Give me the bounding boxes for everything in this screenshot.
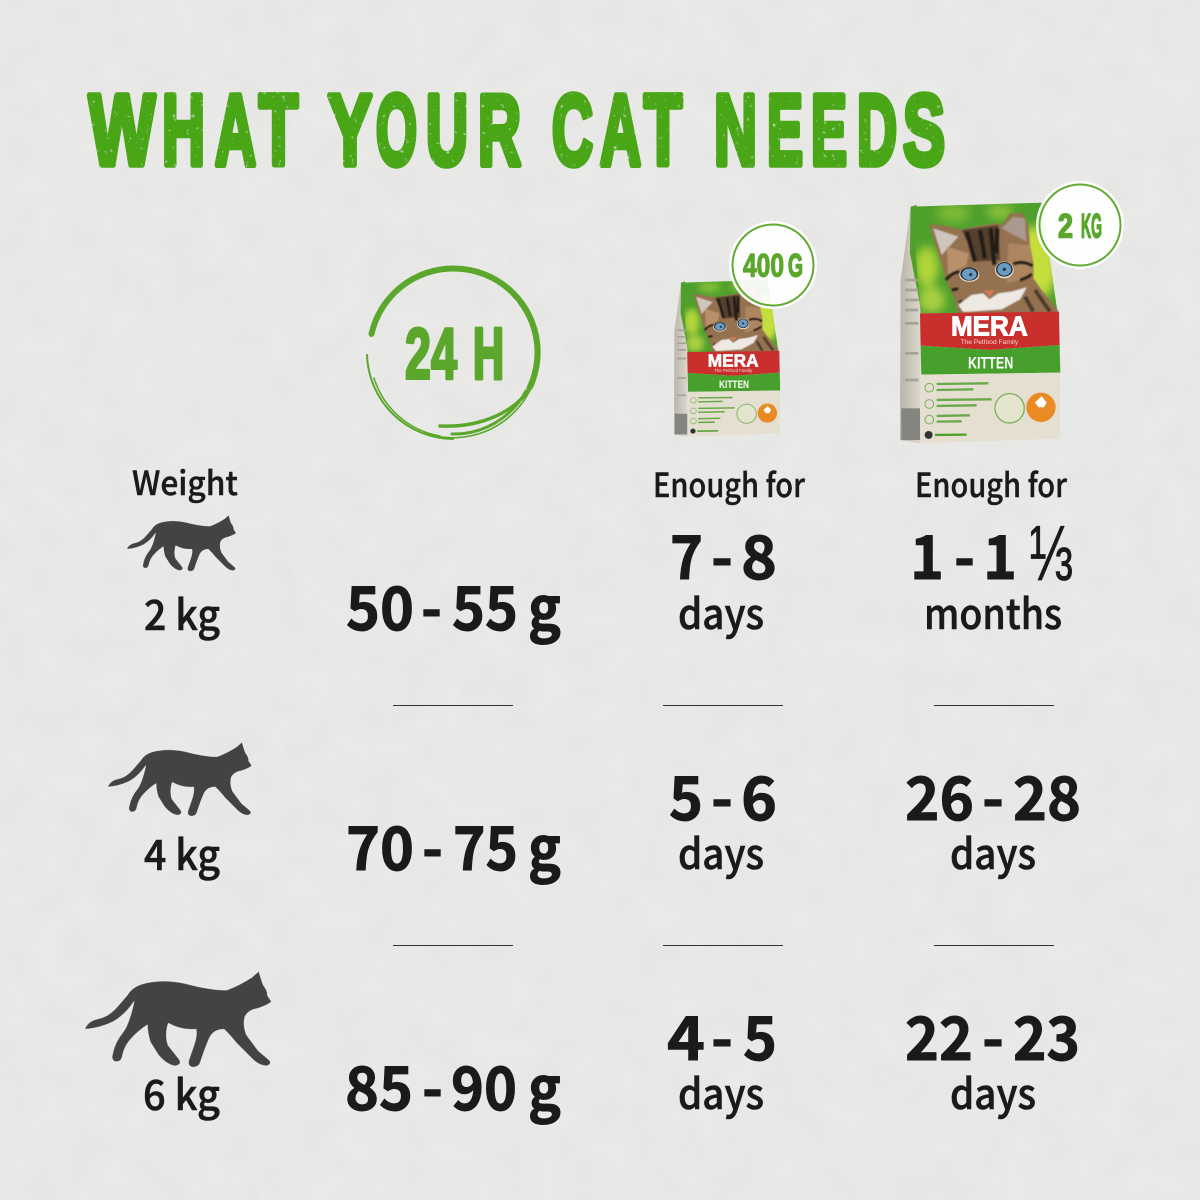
value: 26 - 28 days: days bbox=[950, 821, 1036, 882]
title: A bbox=[215, 75, 256, 187]
value: 26 - 28 days: - bbox=[982, 751, 1004, 838]
value: 4 - 5 days: 5 bbox=[743, 991, 777, 1078]
value: 85 - 90 g bbox=[345, 1041, 561, 1128]
badge: 400 G: G bbox=[788, 248, 803, 284]
value: 4 - 5 days: - bbox=[711, 991, 733, 1078]
value: 22 - 23 days bbox=[905, 991, 1080, 1122]
value: 26 - 28 days: 28 bbox=[1013, 751, 1081, 838]
icon: cat 2 kg bbox=[127, 515, 236, 571]
value: 4 - 5 days: days bbox=[678, 1061, 764, 1122]
badge: 400 G: 400 bbox=[743, 248, 784, 284]
title: A bbox=[600, 75, 641, 187]
value: 22 - 23 days: - bbox=[982, 991, 1004, 1078]
product bag: 2 kg: KITTEN bbox=[968, 354, 1013, 373]
value: 22 - 23 days: 22 bbox=[905, 991, 973, 1078]
value: 7 - 8 days: 7 bbox=[670, 510, 703, 597]
value: 1 - 1 1/3 months: - bbox=[954, 510, 975, 597]
label: 6 kg: 6 kg bbox=[143, 1062, 220, 1123]
product bag: 400 g: The Petfood Family bbox=[714, 368, 753, 373]
value: 26 - 28 days bbox=[905, 751, 1081, 882]
title: W bbox=[89, 75, 155, 187]
value: 50 - 55 g: g bbox=[528, 561, 561, 648]
title bbox=[89, 75, 945, 187]
value: 5 - 6 days: 5 bbox=[669, 751, 703, 838]
value: 22 - 23 days: days bbox=[950, 1061, 1036, 1122]
icon: cat 4 kg bbox=[108, 742, 252, 816]
value: 70 - 75 g: g bbox=[528, 801, 561, 888]
value: 85 - 90 g: 85 bbox=[345, 1041, 413, 1128]
dividers row 2 bbox=[393, 944, 1054, 946]
product bag: 400 g bbox=[674, 278, 780, 436]
value: 1 - 1 1/3 months: 1 bbox=[910, 510, 944, 597]
title: T bbox=[259, 75, 298, 187]
title: E bbox=[767, 75, 803, 187]
value: 7 - 8 days bbox=[670, 510, 777, 642]
value: 70 - 75 g bbox=[346, 801, 561, 888]
badge: 2 KG: KG bbox=[1081, 208, 1102, 246]
icon: 24 H brush circle bbox=[367, 268, 539, 439]
title: Y bbox=[328, 75, 372, 187]
product bag: 400 g: KITTEN bbox=[719, 379, 749, 391]
badge: 400 G bbox=[729, 221, 817, 309]
title: T bbox=[644, 75, 682, 187]
title: R bbox=[478, 75, 521, 187]
heading: enough for 2 kg: Enough for bbox=[915, 459, 1067, 507]
title: C bbox=[552, 75, 593, 187]
label: 2 kg: 2 kg bbox=[144, 582, 220, 643]
title: E bbox=[811, 75, 847, 187]
value: 4 - 5 days: 4 bbox=[667, 991, 705, 1078]
label: 4 kg: 4 kg bbox=[144, 822, 220, 883]
value: 85 - 90 g: g bbox=[528, 1041, 561, 1128]
value: 1 - 1 1/3 months: ⅓ bbox=[1029, 491, 1073, 603]
product bag: 2 kg: The Petfood Family bbox=[960, 339, 1019, 346]
title: U bbox=[426, 75, 468, 187]
value: 50 - 55 g: 55 bbox=[452, 561, 518, 648]
product bag: 2 kg: MERA bbox=[951, 311, 1028, 342]
value: 70 - 75 g: 70 bbox=[346, 801, 414, 888]
24 H label: 24 bbox=[405, 314, 457, 394]
value: 5 - 6 days: - bbox=[711, 751, 733, 838]
title: S bbox=[903, 75, 945, 187]
value: 1 - 1 1/3 months bbox=[910, 491, 1073, 642]
dividers row 1 bbox=[393, 704, 1054, 706]
value: 50 - 55 g: 50 bbox=[346, 561, 414, 648]
24 H label: H bbox=[473, 314, 504, 394]
value: 26 - 28 days: 26 bbox=[905, 751, 974, 838]
value: 22 - 23 days: 23 bbox=[1013, 991, 1080, 1078]
badge: 2 KG bbox=[1036, 181, 1124, 269]
title: N bbox=[714, 75, 757, 187]
product bag: 400 g: MERA bbox=[708, 351, 759, 370]
value: 4 - 5 days bbox=[667, 991, 777, 1122]
value: 7 - 8 days: days bbox=[678, 581, 764, 642]
value: 85 - 90 g: 90 bbox=[451, 1041, 517, 1128]
value: 50 - 55 g: - bbox=[421, 561, 442, 648]
value: 5 - 6 days bbox=[669, 751, 777, 882]
value: 1 - 1 1/3 months: 1 bbox=[983, 510, 1017, 597]
value: 7 - 8 days: - bbox=[711, 510, 733, 597]
title: D bbox=[857, 75, 897, 187]
value: 7 - 8 days: 8 bbox=[741, 510, 777, 597]
value: 50 - 55 g bbox=[346, 561, 561, 648]
value: 70 - 75 g: 75 bbox=[453, 801, 518, 888]
value: 85 - 90 g: - bbox=[422, 1041, 443, 1128]
heading: weight: Weight bbox=[132, 457, 238, 505]
icon: cat 6 kg bbox=[85, 971, 272, 1067]
title: O bbox=[376, 75, 417, 187]
product bag: 2 kg bbox=[900, 200, 1060, 443]
title: H bbox=[162, 75, 205, 187]
heading: enough for 400 g: Enough for bbox=[653, 459, 805, 507]
badge: 2 KG: 2 bbox=[1058, 208, 1073, 246]
value: 1 - 1 1/3 months: months bbox=[924, 581, 1062, 642]
value: 5 - 6 days: 6 bbox=[741, 751, 777, 838]
value: 5 - 6 days: days bbox=[678, 821, 764, 882]
value: 70 - 75 g: - bbox=[422, 801, 443, 888]
